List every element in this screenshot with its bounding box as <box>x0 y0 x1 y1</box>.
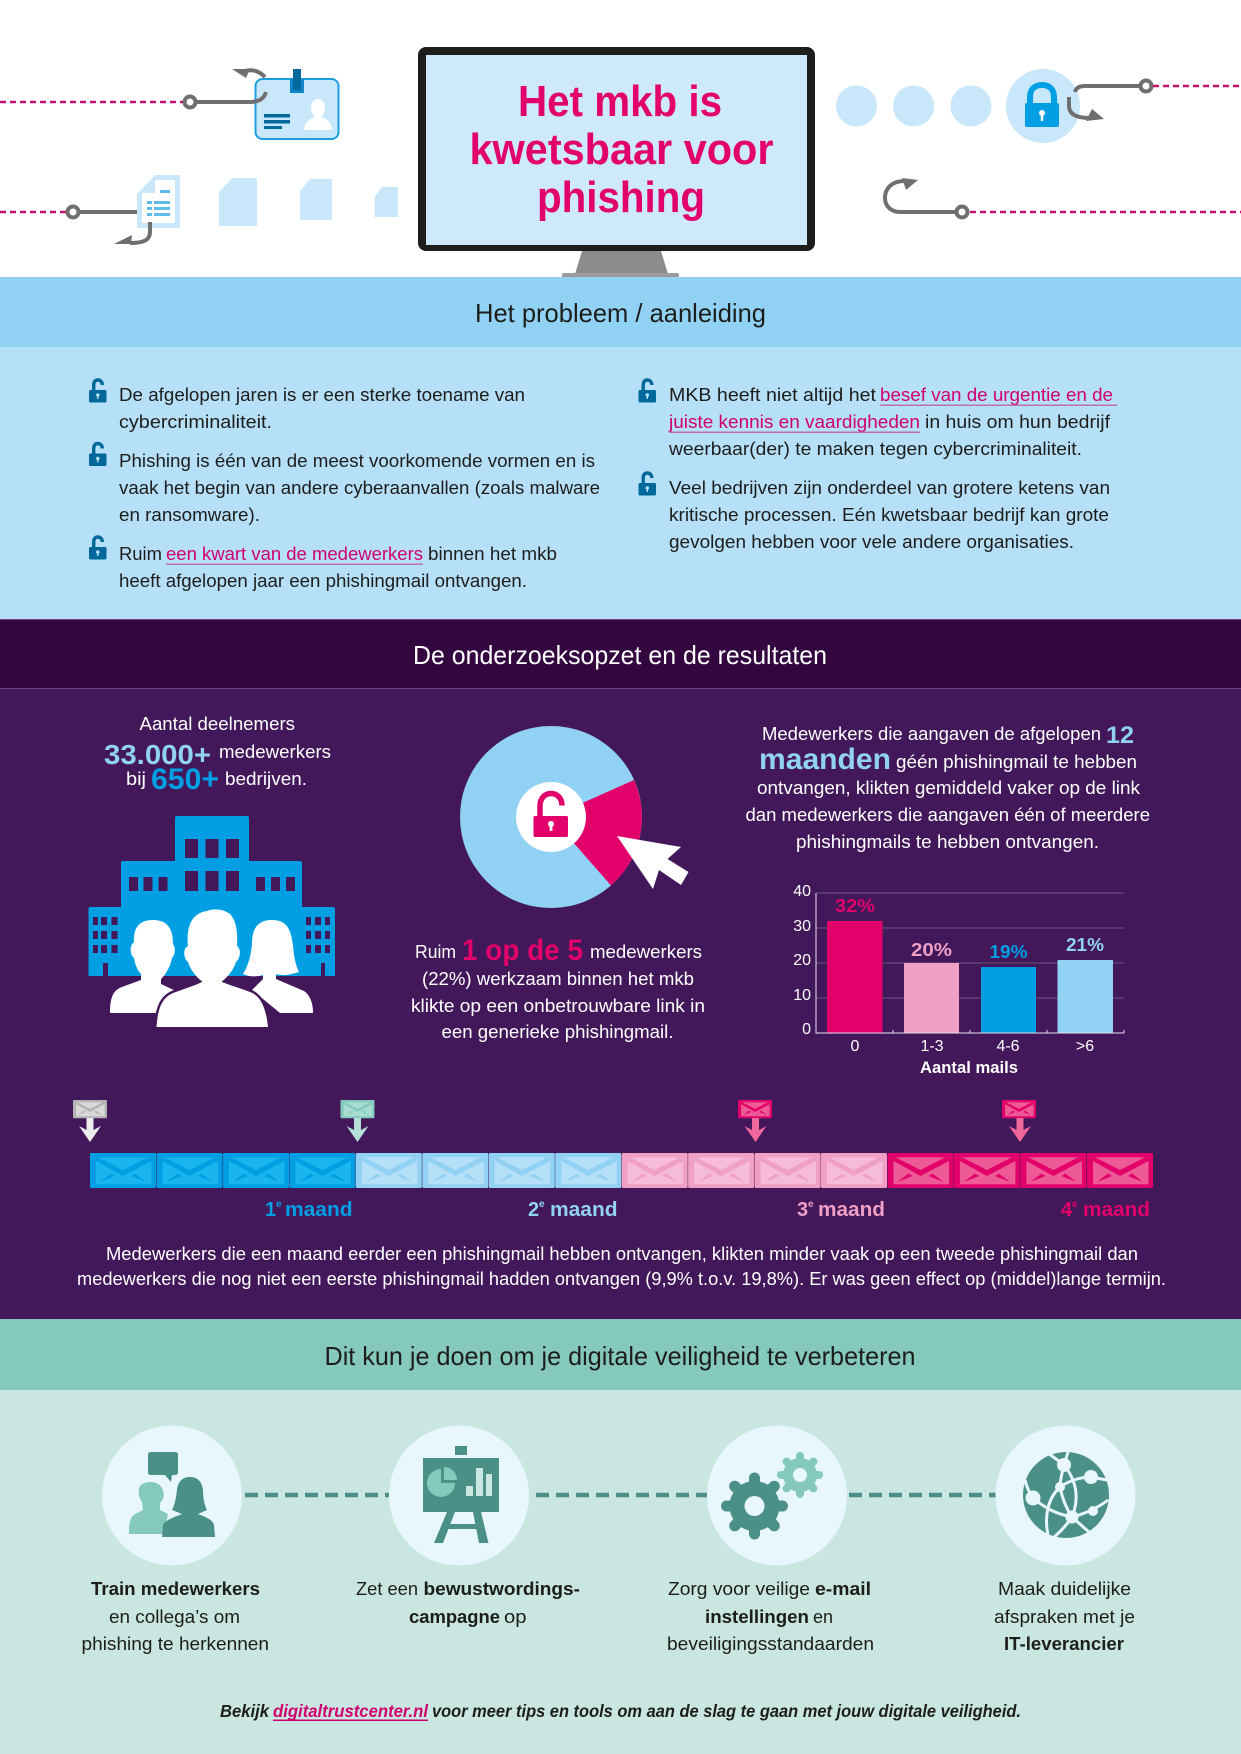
month labels: e <box>1072 1199 1078 1210</box>
icon: grey mail arrow <box>73 1100 107 1142</box>
text block: aantal deelnemers: bij <box>126 768 146 789</box>
panel: dit kun je doen <box>0 1319 1241 1754</box>
dotted line: top right <box>1153 85 1241 87</box>
text block: 1 op de 5 <box>411 934 705 1042</box>
month labels: 4 <box>1061 1199 1073 1221</box>
month labels: e <box>539 1199 545 1210</box>
monitor screen <box>418 47 815 251</box>
title: phishing <box>537 173 705 222</box>
text: bewustwordingscampagne: op <box>504 1606 526 1627</box>
footer call to action: voor meer tips en tools om aan de slag te gaan met jouw digitale veiligheid. <box>432 1701 1021 1721</box>
bullet icons: open padlocks <box>89 380 656 560</box>
text block: 12 maanden: ontvangen, klikten gemiddeld vaker op de link <box>757 777 1141 798</box>
timeline: email markers with arrows <box>73 1100 1036 1142</box>
text block: problem right column: Veel bedrijven zijn onderdeel van grotere ketens van <box>669 477 1110 498</box>
dashed connectors <box>245 1493 996 1497</box>
month labels <box>265 1199 1150 1221</box>
text block: problem left column: De afgelopen jaren is er een sterke toename van <box>119 384 525 405</box>
bar chart: aantal mails: Aantal mails <box>920 1058 1018 1077</box>
pie chart: 22 procent <box>460 726 642 908</box>
footer call to action: Bekijk <box>220 1701 270 1721</box>
bar chart: aantal mails: 30 <box>793 918 811 935</box>
icon: ID card <box>256 69 338 139</box>
icon: teal mail arrow <box>340 1100 374 1142</box>
bar chart: aantal mails: 40 <box>793 883 811 900</box>
text block: problem left column: cybercriminaliteit. <box>119 411 272 432</box>
month labels: maand <box>1083 1199 1150 1221</box>
text block: 12 maanden: 12 <box>1106 722 1134 749</box>
icon: mouse cursor <box>617 836 688 889</box>
text block: 1 op de 5: medewerkers <box>590 941 702 962</box>
text block: problem left column: een kwart van de medewerkers <box>166 543 423 564</box>
text: bewustwordingscampagne: bewustwordings- <box>424 1578 580 1599</box>
text block: aantal deelnemers: bedrijven. <box>225 768 307 789</box>
heading band: onderzoeksopzet <box>0 619 1241 689</box>
text block: 1 op de 5: 1 op de 5 <box>462 934 583 967</box>
text block: conclusion: Medewerkers die een maand eerder een phishingmail hebben ontvangen, klikten minder vaak op een tweede phishingmail dan <box>106 1243 1138 1264</box>
text block: problem right column: juiste kennis en vaardigheden <box>668 411 920 432</box>
text block: aantal deelnemers: medewerkers <box>219 741 331 762</box>
icon: empty fish hook <box>885 178 968 218</box>
icon: train medewerkers <box>102 1426 242 1566</box>
text block: conclusion <box>77 1243 1166 1289</box>
text block: aantal deelnemers <box>104 713 331 796</box>
icon: gears <box>707 1426 847 1566</box>
month labels: maand <box>818 1199 885 1221</box>
text: e-mail instellingen: Zorg voor veilige <box>668 1578 810 1599</box>
text block: problem right column: gevolgen hebben voor vele andere organisaties. <box>669 531 1074 552</box>
title: Het mkb is <box>518 77 722 126</box>
text: IT-leverancier: afspraken met je <box>994 1606 1135 1627</box>
text block: problem right column: besef van de urgentie en de <box>880 384 1113 405</box>
text: IT-leverancier: IT-leverancier <box>1004 1633 1124 1654</box>
text: e-mail instellingen: beveiligingsstandaarden <box>667 1633 874 1654</box>
text: e-mail instellingen: en <box>813 1606 833 1627</box>
text block: aantal deelnemers: 33.000+ <box>104 739 211 770</box>
title: kwetsbaar voor <box>470 125 774 174</box>
bar chart: aantal mails: 10 <box>793 987 811 1004</box>
heading band: onderzoeksopzet: De onderzoeksopzet en de resultaten <box>413 640 827 670</box>
text block: problem right column <box>668 384 1117 552</box>
icon: pink mail arrow 2 <box>1002 1100 1036 1142</box>
text block: problem right column: MKB heeft niet altijd het <box>669 384 876 405</box>
bar chart: aantal mails: >6 <box>1076 1038 1094 1055</box>
text: IT-leverancier <box>994 1578 1135 1654</box>
text block: 1 op de 5: een generieke phishingmail. <box>442 1021 674 1042</box>
month labels: maand <box>550 1199 618 1221</box>
panel: het probleem <box>0 277 1241 619</box>
text block: conclusion: medewerkers die nog niet een eerste phishingmail hadden ontvangen (9,9% t.o.v. 19,8%). Er was geen effect op (middel)lange termijn. <box>77 1268 1166 1289</box>
text: IT-leverancier: Maak duidelijke <box>998 1578 1131 1599</box>
panel: onderzoeksopzet en resultaten <box>0 619 1241 1319</box>
text: bewustwordingscampagne: Zet een <box>356 1578 418 1599</box>
text: e-mail instellingen <box>667 1578 874 1654</box>
bar chart: aantal mails: 20 <box>793 952 811 969</box>
bar chart: aantal mails: 19% <box>990 942 1028 962</box>
text: bewustwordingscampagne: campagne <box>409 1606 500 1627</box>
text block: 12 maanden <box>746 722 1150 852</box>
dotted line: top left <box>0 101 183 103</box>
text block: problem left column: en ransomware). <box>119 504 260 525</box>
text block: problem right column: weerbaar(der) te maken tegen cybercriminaliteit. <box>668 438 1082 459</box>
panel: header illustration <box>0 47 1241 278</box>
text block: 12 maanden: phishingmails te hebben ontvangen. <box>796 831 1099 852</box>
icon: pink mail arrow <box>738 1100 772 1142</box>
bar chart: aantal mails: 0 <box>802 1021 811 1038</box>
month labels: 3 <box>797 1199 808 1221</box>
text block: problem left column: Ruim <box>119 543 162 564</box>
bar chart: aantal mails: 1-3 <box>920 1038 944 1055</box>
fading circles <box>836 86 992 126</box>
text: e-mail instellingen: e-mail <box>815 1578 871 1599</box>
icon: fish hook on ID card <box>184 69 266 108</box>
month labels: 2 <box>528 1199 539 1221</box>
text block: 12 maanden: géén phishingmail te hebben <box>896 751 1137 772</box>
text block: problem right column: kritische processen. Eén kwetsbaar bedrijf kan grote <box>669 504 1109 525</box>
bar chart: aantal mails: 21% <box>1066 935 1104 955</box>
heading band: dit kun je doen <box>0 1319 1241 1390</box>
text: train medewerkers <box>82 1578 269 1654</box>
text block: 12 maanden: Medewerkers die aangaven de afgelopen <box>762 723 1101 744</box>
text block: aantal deelnemers: Aantal deelnemers <box>140 713 295 734</box>
icon: locked padlock in circle <box>1006 69 1080 143</box>
bar chart: aantal mails <box>793 883 1124 1077</box>
heading band: het probleem <box>0 277 1241 347</box>
text block: 1 op de 5: Ruim <box>415 941 456 962</box>
footer call to action: digitaltrustcenter.nl <box>273 1701 429 1721</box>
fading document shapes <box>219 178 398 226</box>
dotted line: lower right <box>970 211 1241 213</box>
icon: office buildings <box>88 816 335 976</box>
envelope strip: four months <box>90 1153 1153 1188</box>
text: train medewerkers: Train medewerkers <box>91 1578 260 1599</box>
month labels: e <box>808 1199 814 1210</box>
text block: problem left column: Phishing is één van de meest voorkomende vormen en is <box>119 450 595 471</box>
text block: 12 maanden: maanden <box>759 743 891 776</box>
bar chart: aantal mails: 0 <box>851 1038 860 1055</box>
text block: 1 op de 5: klikte op een onbetrouwbare link in <box>411 995 705 1016</box>
bar chart: aantal mails: 20% <box>911 940 952 960</box>
text block: 12 maanden: dan medewerkers die aangaven één of meerdere <box>746 804 1150 825</box>
icon: fish hook on document <box>68 206 150 244</box>
text block: aantal deelnemers: 650+ <box>151 763 219 796</box>
text: bewustwordingscampagne <box>356 1578 580 1627</box>
text block: problem left column <box>119 384 600 591</box>
icon: document <box>137 175 180 228</box>
text block: problem left column: binnen het mkb <box>428 543 557 564</box>
icon: presentation easel <box>389 1426 529 1566</box>
month labels: 1 <box>265 1199 276 1221</box>
dotted line: lower left <box>0 211 67 213</box>
heading band: het probleem: Het probleem / aanleiding <box>475 298 766 328</box>
text: train medewerkers: phishing te herkennen <box>82 1633 269 1654</box>
month labels: maand <box>285 1199 353 1221</box>
text: e-mail instellingen: instellingen <box>705 1606 809 1627</box>
icon: fish hook at padlock <box>1069 80 1152 121</box>
month labels: e <box>276 1199 282 1210</box>
heading band: dit kun je doen: Dit kun je doen om je digitale veiligheid te verbeteren <box>324 1341 916 1371</box>
icon: monitor stand <box>562 251 679 278</box>
bar chart: aantal mails: 4-6 <box>996 1038 1020 1055</box>
text block: 1 op de 5: (22%) werkzaam binnen het mkb <box>422 968 694 989</box>
text block: problem right column: in huis om hun bedrijf <box>925 411 1111 432</box>
text: train medewerkers: en collega’s om <box>109 1606 240 1627</box>
icon: globe network <box>996 1426 1136 1566</box>
text block: problem left column: heeft afgelopen jaar een phishingmail ontvangen. <box>119 570 527 591</box>
text block: problem left column: vaak het begin van andere cyberaanvallen (zoals malware <box>119 477 600 498</box>
icon: open padlock pink <box>534 794 568 837</box>
icon: three people <box>110 909 313 1027</box>
bar chart: aantal mails: 32% <box>835 896 875 916</box>
title <box>470 77 774 222</box>
